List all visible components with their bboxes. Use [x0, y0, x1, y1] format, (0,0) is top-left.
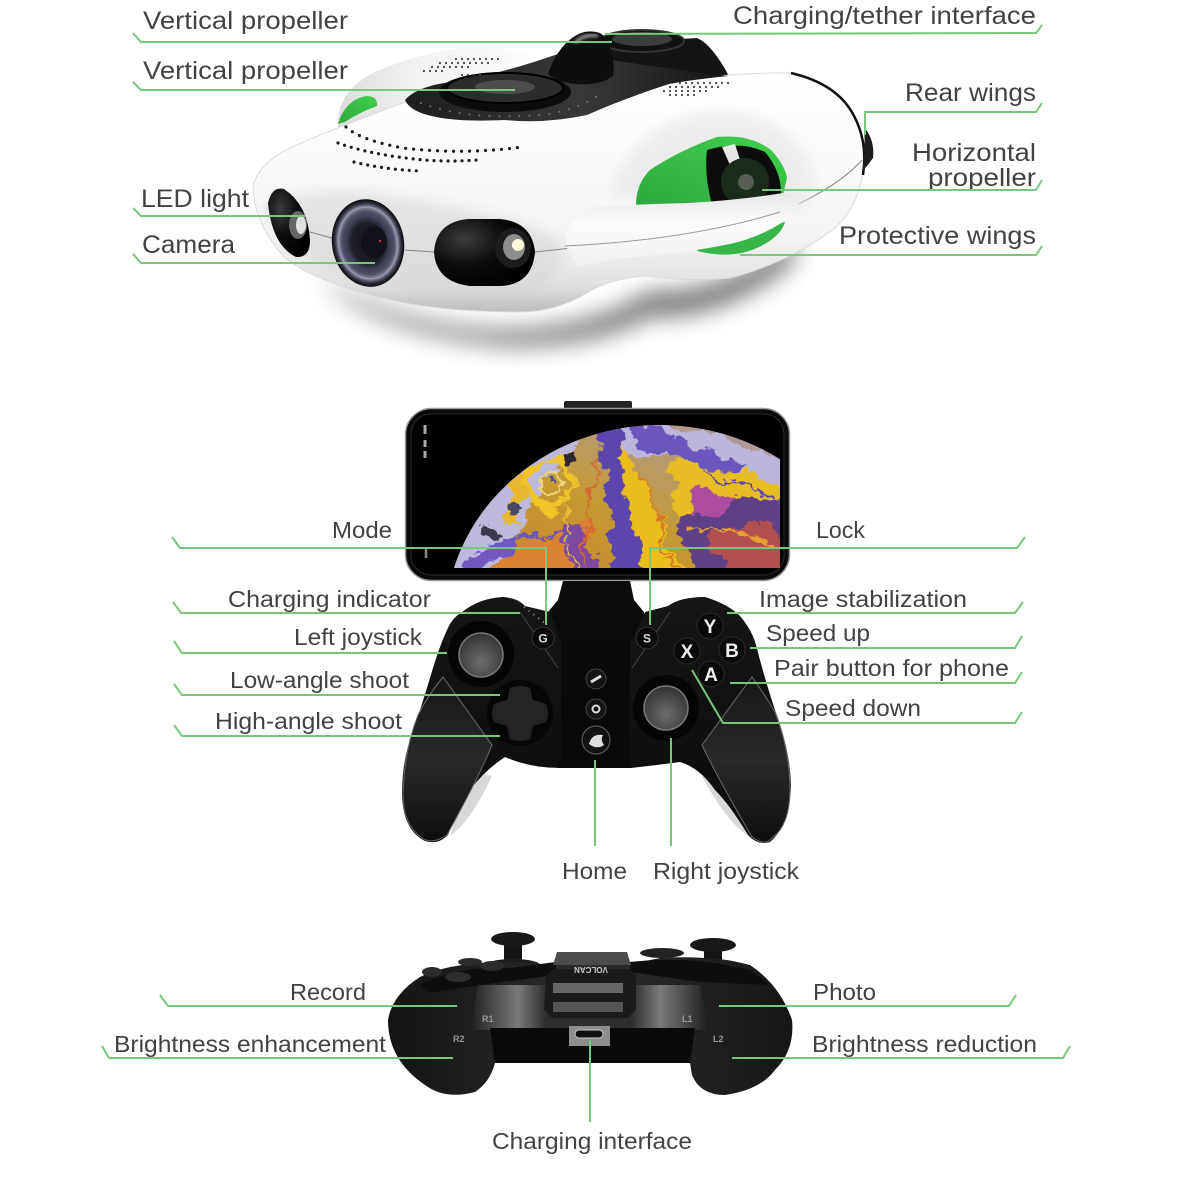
camera lens: [325, 193, 411, 293]
controller body: [402, 597, 791, 843]
front propeller: [439, 72, 571, 112]
label: Home: [562, 760, 627, 884]
panel: phone: [406, 401, 810, 585]
clamp rollers: [544, 969, 636, 1018]
button G: G: [538, 632, 548, 646]
left grip: [403, 677, 492, 841]
label: Low-angle shoot: [174, 667, 500, 695]
label: Charging interface: Charging interface: [492, 1128, 692, 1154]
face buttons left: [422, 958, 504, 982]
trigger markings: L1: [682, 1014, 693, 1024]
phone mount arm: [548, 581, 644, 655]
label: Charging indicator: Charging indicator: [228, 586, 431, 612]
rear body rim: [791, 73, 864, 175]
infographic canvas: [101, 6, 1071, 1154]
button B: B: [725, 641, 739, 662]
lower trim: [490, 1028, 695, 1063]
right stick cap: [644, 686, 688, 730]
rear-left shoulder and green wing: [338, 46, 560, 130]
button G: [532, 627, 554, 649]
home button: [582, 726, 610, 754]
label: Low-angle shoot: Low-angle shoot: [230, 667, 410, 693]
label: Charging indicator: [173, 586, 520, 613]
label: Pair button for phone: Pair button for phone: [774, 655, 1009, 681]
label: Vertical propeller front: [133, 57, 515, 90]
front face shading: [262, 191, 561, 296]
button S: S: [643, 632, 651, 646]
button A: [698, 661, 724, 687]
directional pad: [487, 680, 553, 746]
phone case: [406, 408, 790, 580]
label: Speed up: [750, 620, 1022, 648]
label: Mode: [172, 517, 546, 625]
phone screen: [411, 414, 784, 575]
label: Lock: Lock: [816, 517, 865, 543]
left stick recess: [448, 621, 514, 687]
label: Horizontal propeller: Horizontal: [912, 139, 1036, 167]
clamp top: [564, 401, 632, 411]
label: Mode: Mode: [332, 517, 392, 543]
label: Brightness reduction: Brightness reduction: [812, 1031, 1037, 1057]
front dots row: [338, 127, 522, 171]
right LED pod: [434, 219, 535, 286]
label: Protective wings: [740, 222, 1042, 255]
label: Record: Record: [290, 979, 366, 1005]
speaker dots rear right: [664, 83, 734, 95]
label: LED light: [133, 185, 305, 216]
top deck: [405, 50, 728, 121]
trigger markings: [453, 1014, 724, 1044]
centre button circle: [586, 699, 606, 719]
label: Vertical propeller rear: Vertical propeller: [143, 7, 348, 35]
indicator dots: [524, 607, 546, 624]
arm seam: [565, 212, 780, 246]
label: Speed up: Speed up: [766, 620, 870, 646]
knob highlight: [575, 35, 598, 43]
planet wallpaper: [454, 425, 780, 568]
tether knob: [548, 31, 614, 84]
label: Protective wings: Protective wings: [839, 222, 1036, 250]
status icons: [424, 425, 426, 458]
rear top shell: [420, 960, 770, 993]
trigger markings: R2: [453, 1034, 465, 1044]
centre button slash: [586, 669, 606, 689]
lower green wing: [697, 222, 785, 255]
label: Horizontal propeller: [762, 139, 1042, 192]
drone ground shadow: [320, 235, 800, 345]
button X: [674, 638, 700, 664]
right stick recess: [633, 675, 699, 741]
face buttons right: [640, 948, 684, 958]
left stick cap: [459, 633, 503, 677]
panel: controller front: [402, 581, 791, 843]
button B: [719, 637, 745, 663]
label: Camera: [133, 231, 375, 263]
button A: A: [704, 665, 718, 686]
label: Lock: [650, 517, 1025, 625]
centre plate: [558, 640, 632, 768]
label: Right joystick: Right joystick: [653, 858, 800, 884]
label: Speed down: [692, 670, 1022, 723]
label: Photo: Photo: [813, 979, 876, 1005]
panel: underwater drone: [253, 30, 873, 345]
label: Charging/tether interface: [605, 2, 1042, 34]
deck dots: [421, 96, 597, 116]
side scoop shading: [610, 112, 812, 215]
phone clamp back: [553, 952, 631, 965]
button X: X: [681, 642, 694, 663]
right grip: [702, 677, 790, 842]
grip highlights: [450, 772, 748, 836]
label: Record: [160, 979, 457, 1006]
label: LED light: LED light: [141, 185, 249, 213]
panel: controller rear: [388, 932, 792, 1095]
label: Image stabilization: [727, 586, 1023, 613]
label: High-angle shoot: [174, 708, 500, 736]
label: High-angle shoot: High-angle shoot: [215, 708, 403, 734]
label: Speed down: Speed down: [785, 695, 921, 721]
label: Vertical propeller rear: [133, 7, 612, 42]
label: Home: Home: [562, 858, 627, 884]
label: Brightness enhancement: [102, 1031, 453, 1058]
rear wing fin: [862, 127, 873, 172]
label: Charging/tether interface: Charging/tether interface: [733, 2, 1036, 30]
label: Left joystick: Left joystick: [294, 624, 423, 650]
label: Rear wings: Rear wings: [905, 79, 1036, 107]
label: Pair button for phone: [730, 655, 1022, 683]
horizontal propeller recess: [706, 144, 781, 206]
rear middle panel: [470, 985, 708, 1030]
button S: [636, 627, 658, 649]
left thumbstick: [485, 932, 541, 973]
label: Vertical propeller front: Vertical propeller: [143, 57, 348, 85]
label: Brightness enhancement: Brightness enhancement: [114, 1031, 387, 1057]
label: Left joystick: [174, 624, 447, 653]
home indicator: [425, 547, 427, 558]
USB-C port: [569, 1026, 610, 1046]
clamp text: VOLCAN: [574, 965, 608, 974]
button Y: Y: [704, 617, 717, 638]
seam line: [310, 160, 862, 252]
label: Camera: Camera: [142, 231, 235, 259]
body seams: [520, 612, 670, 668]
label: Horizontal propeller: propeller: [928, 164, 1036, 192]
rear body: [388, 957, 792, 1095]
label: Brightness reduction: [732, 1031, 1070, 1058]
drone main body: [253, 73, 865, 312]
protective wing arm: [566, 193, 799, 267]
label: Image stabilization: Image stabilization: [759, 586, 967, 612]
left LED pod: [268, 189, 310, 257]
trigger markings: R1: [482, 1014, 494, 1024]
rear propeller housing: [540, 30, 730, 110]
right thumbstick: [674, 938, 746, 977]
label: Photo: [719, 979, 1016, 1006]
speaker dots rear left: [424, 59, 500, 75]
green horizontal wing inner: [636, 137, 787, 205]
trigger markings: L2: [713, 1034, 724, 1044]
label: Rear wings: [865, 79, 1042, 135]
button Y: [697, 613, 723, 639]
